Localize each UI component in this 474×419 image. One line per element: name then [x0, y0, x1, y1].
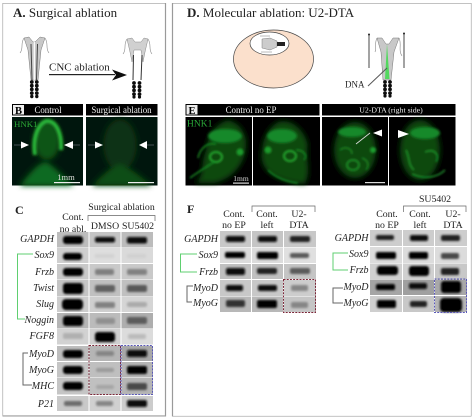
gene labels F left: MyoD	[192, 283, 219, 294]
panel E header: control no EP: E	[188, 106, 196, 117]
column headers F left: DTA	[289, 220, 309, 231]
micrograph: control HNK1	[12, 117, 83, 186]
gene labels panel C: Twist	[33, 283, 54, 294]
column headers F left: Cont.	[223, 209, 245, 220]
bracket: grey F right	[333, 288, 343, 303]
column headers F right: no EP	[375, 220, 399, 231]
embryo diagram: ablated	[123, 38, 152, 99]
heading A: A. Surgical ablation	[13, 5, 118, 20]
gene labels panel C: Frzb	[34, 267, 54, 278]
column headers: SU5402	[122, 221, 154, 232]
header: SU5402 bracket	[404, 194, 466, 212]
gel: RT-PCR panel C	[57, 232, 153, 411]
micrograph: control embryo 1: HNK1	[187, 120, 213, 130]
bracket: grey myogenic genes	[23, 353, 32, 385]
arrow: ablation	[49, 70, 127, 80]
gene labels F left: Sox9	[199, 250, 218, 261]
column headers F left: U2-	[291, 209, 307, 220]
panel F label: F	[187, 202, 194, 216]
gene labels panel C: MyoD	[28, 349, 55, 360]
embryo diagram: control	[20, 37, 49, 98]
column headers: DMSO	[91, 221, 119, 232]
gene labels F right	[335, 233, 369, 309]
highlight: blue dashed box F	[434, 279, 466, 312]
gene labels panel C	[20, 234, 55, 410]
gene labels panel C: FGF8	[29, 331, 54, 342]
gene labels F right: Frzb	[349, 265, 368, 276]
column headers F right: left	[413, 220, 427, 231]
micrograph: surgical ablation HNK1	[86, 117, 158, 186]
gene labels panel C: MHC	[31, 381, 54, 392]
panel B header: surgical ablation: Surgical ablation	[91, 105, 152, 115]
panel B header: control	[12, 104, 83, 117]
bracket: green F right	[333, 253, 348, 270]
gene labels panel C: Sox9	[35, 250, 54, 261]
micrograph: control embryo 1: 1mm	[233, 174, 249, 183]
gene labels F right: MyoD	[342, 282, 369, 293]
panel E header: control no EP	[186, 104, 320, 117]
panel B header: control: Control	[34, 105, 62, 115]
gene labels panel C: MyoG	[28, 365, 54, 376]
column headers F left: left	[260, 220, 274, 231]
column headers F right: U2-	[445, 209, 461, 220]
gene labels F right: Sox9	[349, 249, 368, 260]
panel: surgical ablation	[2, 3, 166, 416]
label: DNA with pointer: DNA	[345, 80, 365, 90]
highlight: blue dashed box	[121, 346, 152, 394]
panel C label: C	[15, 203, 24, 217]
micrograph: control HNK1: 1mm	[57, 172, 75, 182]
micrograph: U2-DTA embryo 2	[389, 117, 456, 186]
panel: molecular ablation	[172, 3, 472, 416]
label: DNA with pointer	[345, 68, 387, 90]
micrograph: control HNK1: HNK1	[14, 119, 37, 129]
bracket: grey F left	[187, 286, 193, 302]
header: SU5402 bracket: SU5402	[419, 194, 451, 205]
column headers: Cont.	[62, 212, 84, 223]
panel B header: control: B	[15, 106, 22, 117]
micrograph: U2-DTA embryo 1	[322, 117, 388, 186]
panel E header: U2-DTA	[322, 104, 456, 116]
column headers F left: Cont.	[256, 209, 278, 220]
header: surgical ablation bracket: Surgical ablation	[88, 202, 155, 213]
heading D: D. Molecular ablation: U2-DTA	[187, 5, 355, 20]
bracket: green chondrogenic genes	[18, 254, 33, 319]
gene labels F left: MyoG	[192, 298, 218, 309]
gene labels panel C: GAPDH	[20, 234, 55, 245]
column headers	[60, 212, 154, 235]
micrograph: control embryo 1	[186, 117, 252, 186]
gene labels F right: GAPDH	[335, 233, 369, 244]
panel E header: control no EP: Control no EP	[226, 105, 276, 115]
column headers F right: DTA	[443, 220, 463, 231]
micrograph: control embryo 2	[253, 117, 320, 186]
gene labels panel C: Noggin	[24, 315, 54, 326]
diagram: electroporated embryo	[368, 32, 405, 98]
column headers F left: no EP	[222, 220, 246, 231]
gel: RT-PCR panel F left	[220, 231, 316, 312]
diagram: egg with embryo	[234, 30, 314, 88]
gene labels panel C: P21	[37, 399, 54, 410]
gene labels F left: Frzb	[198, 267, 218, 278]
column headers F right	[375, 209, 463, 231]
column headers F right: Cont.	[376, 209, 398, 220]
gel: RT-PCR panel F right	[370, 230, 467, 312]
panel E header: U2-DTA: U2-DTA (right side)	[359, 106, 423, 114]
gene labels F left: GAPDH	[184, 234, 219, 245]
gene labels panel C: Slug	[36, 299, 54, 310]
bracket: green F left	[180, 254, 197, 272]
column headers F left	[222, 206, 315, 231]
header: surgical ablation bracket	[88, 202, 155, 221]
highlight: red dashed box F	[284, 280, 316, 312]
highlight: red dashed box	[89, 346, 120, 394]
label: CNC ablation: CNC ablation	[49, 62, 110, 74]
gene labels F left	[184, 234, 219, 309]
column headers: no abl.	[60, 224, 86, 235]
gene labels F right: MyoG	[342, 298, 368, 309]
column headers F right: Cont.	[409, 209, 431, 220]
